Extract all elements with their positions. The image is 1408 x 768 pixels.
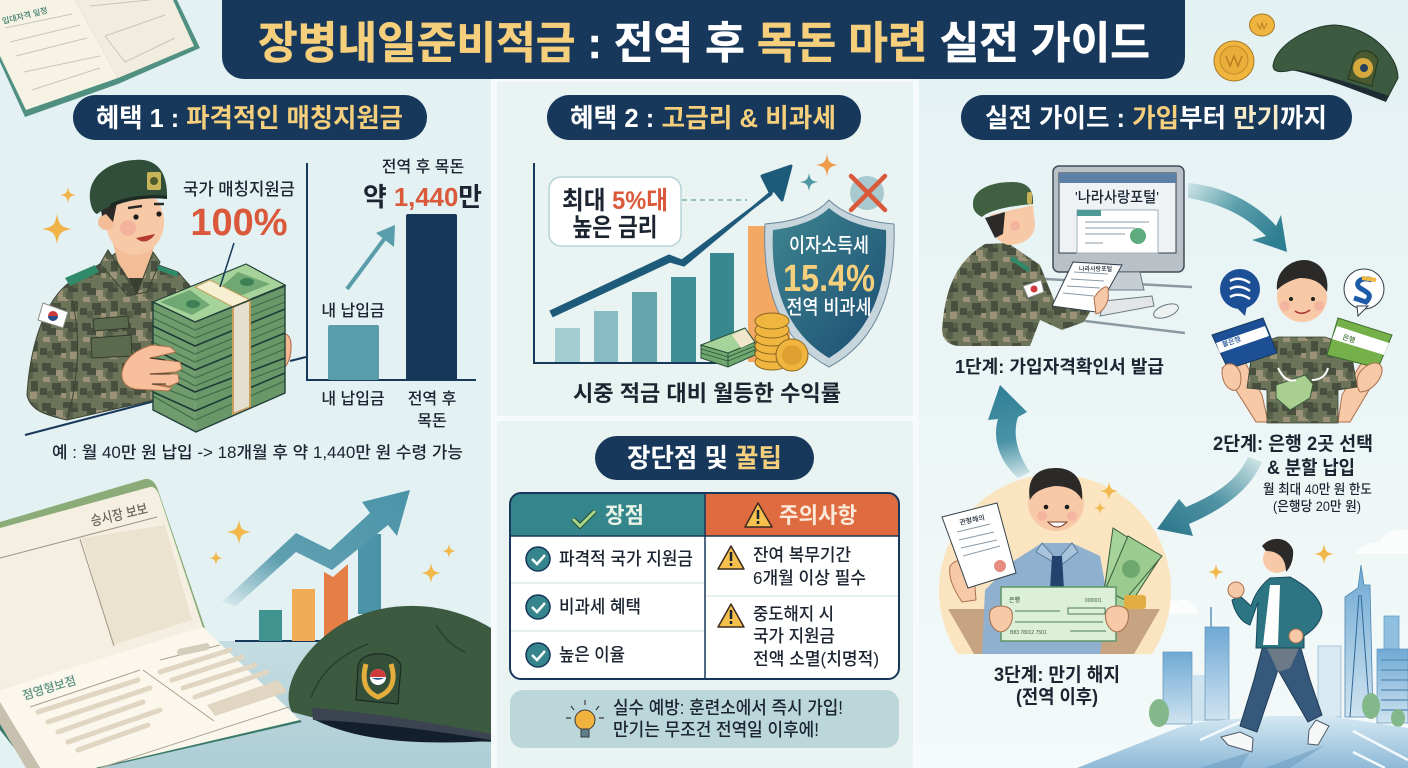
fist bbox=[1228, 582, 1244, 598]
panel: practical guide background bbox=[919, 0, 1408, 768]
arrow: rate growth bbox=[550, 166, 791, 316]
illustration: step 2 soldier with bank cards bbox=[1212, 260, 1392, 423]
chart: contribution versus final amount: 전역 후 목돈 bbox=[382, 158, 464, 176]
coins on counter bbox=[1124, 595, 1146, 609]
callout: maximum rate: 최대 5%대 bbox=[562, 187, 668, 215]
illustration: open bank book bbox=[0, 479, 302, 768]
collar bbox=[100, 250, 160, 296]
desk lines bbox=[1045, 279, 1192, 333]
bar: final amount bbox=[406, 214, 457, 380]
step 2 label: 2단계: 은행 2곳 선택 bbox=[1213, 433, 1373, 455]
pro row 3 bbox=[526, 643, 625, 667]
bank bubble: blue bbox=[1220, 269, 1260, 316]
icon: tax-free shield bbox=[765, 200, 894, 367]
caution row 2: 전액 소멸(치명적) bbox=[753, 649, 879, 669]
road bbox=[1077, 716, 1408, 768]
pro row 2: 비과세 혜택 bbox=[559, 597, 641, 617]
bank card: green: 은행 bbox=[1341, 332, 1356, 345]
caution row 2 bbox=[718, 604, 879, 669]
step 2 label: 월 최대 40만 원 한도 bbox=[1263, 481, 1372, 497]
callout: mistake prevention tip bbox=[510, 690, 899, 748]
sparkles: step 3 bbox=[1094, 482, 1118, 514]
keyboard and mouse bbox=[1100, 296, 1154, 316]
panel: benefit 1 background bbox=[0, 0, 491, 768]
paper band bbox=[195, 280, 250, 307]
step 3 label: 3단계: 만기 해지 bbox=[994, 664, 1120, 686]
paper in hand bbox=[1052, 262, 1122, 312]
head bbox=[1028, 475, 1084, 531]
dashed leader line bbox=[682, 199, 747, 201]
illustration: step 3 circle scene bbox=[939, 468, 1171, 654]
sparkles: growth bbox=[209, 520, 456, 583]
heading: pros and tips bbox=[595, 436, 814, 480]
callout: mistake prevention tip: 실수 예방: 훈련소에서 즉시 가입! bbox=[613, 698, 843, 718]
pro row 3: 높은 이율 bbox=[559, 645, 625, 665]
bank card: green bbox=[1327, 318, 1392, 368]
near hand on stack bbox=[122, 345, 182, 391]
jacket bbox=[1232, 577, 1322, 648]
table header: pros: 장점 bbox=[605, 503, 644, 528]
table header: cautions bbox=[705, 493, 899, 536]
arrow: step 3 to step 1 bbox=[988, 385, 1030, 478]
bank card: blue: 불은행 bbox=[1221, 334, 1242, 349]
sparkles: walking man bbox=[1208, 544, 1334, 580]
money stack bbox=[153, 264, 285, 432]
heading: benefit 2 bbox=[547, 95, 861, 140]
table header: cautions: 주의사항 bbox=[779, 503, 857, 528]
caution row 1: 6개월 이상 필수 bbox=[753, 568, 866, 588]
panel: benefit 2 background bbox=[497, 82, 913, 416]
head bbox=[1263, 545, 1291, 573]
sparkles: rate bbox=[800, 154, 838, 191]
arrow: growth bbox=[347, 238, 385, 289]
heading: practical guide: 실전 가이드 : 가입부터 만기까지 bbox=[985, 103, 1327, 133]
chart: interest rate growth bbox=[534, 163, 791, 363]
city skyline bbox=[1149, 530, 1408, 727]
illustration: discharged man walking bbox=[1221, 539, 1329, 752]
illustration: top-right coins bbox=[1214, 14, 1274, 81]
illustration: top-right beret bbox=[1273, 25, 1398, 102]
step 2 label bbox=[1213, 433, 1373, 514]
clouds bbox=[1355, 530, 1408, 554]
book label text: 입대자격 일정 bbox=[1, 5, 48, 26]
caution row 2: 국가 지원금 bbox=[753, 626, 835, 646]
book heading: 승시장 보보 bbox=[89, 500, 149, 529]
icon: tax-free shield: 15.4% bbox=[783, 258, 875, 300]
counter bbox=[948, 609, 1160, 654]
monitor bbox=[1053, 166, 1184, 290]
chart: contribution versus final amount: 내 납입금 bbox=[321, 390, 385, 408]
icon: tax-free shield: 이자소득세 bbox=[789, 234, 869, 257]
heading: pros and tips: 장단점 및 꿀팁 bbox=[627, 443, 782, 473]
pro row 1 bbox=[526, 547, 693, 571]
uniform bbox=[27, 250, 192, 420]
cash fan bbox=[1102, 528, 1160, 620]
beret bbox=[90, 160, 167, 214]
check: 000001 bbox=[1085, 598, 1102, 604]
chart: contribution versus final amount: 목돈 bbox=[417, 413, 447, 430]
sleeve fold bbox=[68, 300, 78, 418]
callout: maximum rate bbox=[549, 177, 681, 246]
caption: benefit 2: 시중 적금 대비 월등한 수익률 bbox=[573, 381, 841, 406]
arrow: zigzag growth bbox=[222, 490, 410, 606]
caution row 2: 중도해지 시 bbox=[753, 604, 834, 624]
head bbox=[106, 189, 164, 255]
step 3 label: (전역 이후) bbox=[1016, 686, 1098, 708]
check: B83 78012 7501 bbox=[1010, 630, 1047, 636]
hand in pocket bbox=[1289, 629, 1303, 643]
icon: tax-free shield: 전역 비과세 bbox=[786, 296, 872, 319]
sparkles: soldier bbox=[42, 187, 76, 244]
illustration: green beret bbox=[289, 606, 491, 743]
icon: cash and coins bbox=[701, 313, 808, 371]
step 1 label: 1단계: 가입자격확인서 발급 bbox=[955, 357, 1164, 377]
chart: contribution versus final amount bbox=[307, 158, 482, 430]
left hand and document bbox=[950, 560, 976, 602]
heading: benefit 1: 혜택 1 : 파격적인 매칭지원금 bbox=[96, 103, 403, 133]
chart: contribution versus final amount: 약 1,440만 bbox=[363, 182, 482, 212]
epaulettes bbox=[65, 265, 178, 286]
illustration: step 3 circle scene: 관형해의 bbox=[959, 513, 986, 527]
step 2 label: (은행당 20만 원) bbox=[1273, 499, 1361, 514]
example text: 예 : 월 40만 원 납입 -> 18개월 후 약 1,440만 원 수령 가능 bbox=[52, 443, 463, 462]
lower arms bbox=[1222, 362, 1382, 422]
table header: pros bbox=[510, 493, 705, 536]
panel: pros and cons background bbox=[497, 421, 913, 768]
trees bbox=[1149, 699, 1169, 727]
callout: matching 100%: 국가 매칭지원금 bbox=[183, 180, 295, 199]
pro row 2 bbox=[526, 595, 641, 619]
hands on check bbox=[989, 606, 1128, 632]
shirt bbox=[1247, 337, 1357, 423]
soldier head bbox=[990, 205, 1035, 245]
heading: benefit 1 bbox=[73, 95, 427, 140]
callout: matching 100%: 100% bbox=[190, 202, 288, 244]
trousers bbox=[1240, 645, 1322, 732]
chart: contribution versus final amount: 전역 후 bbox=[408, 390, 456, 408]
illustration: step 1 soldier at computer bbox=[942, 166, 1192, 346]
shoes bbox=[1221, 732, 1253, 752]
bar: my contribution bbox=[328, 325, 379, 380]
caution row 1 bbox=[718, 545, 866, 588]
illustration: rising bars and arrow bbox=[222, 490, 410, 641]
title banner bbox=[222, 0, 1185, 79]
heading: practical guide bbox=[961, 95, 1352, 140]
t-shirt bbox=[1263, 585, 1280, 645]
bank card: blue bbox=[1212, 318, 1277, 369]
arrow: step 1 to step 2 bbox=[1188, 183, 1287, 252]
title text: 장병내일준비적금 : 전역 후 목돈 마련 실전 가이드 bbox=[258, 19, 1150, 68]
arrow: step 2 to step 3 bbox=[1157, 457, 1262, 536]
icon: light bulb bbox=[566, 700, 604, 737]
heading: benefit 2: 혜택 2 : 고금리 & 비과세 bbox=[570, 103, 836, 133]
book subheading: 점영형보점 bbox=[20, 672, 78, 703]
callout: maximum rate: 높은 금리 bbox=[572, 214, 658, 242]
table line bbox=[25, 357, 306, 435]
pockets bbox=[91, 316, 132, 358]
illustration: open record book top-left bbox=[0, 0, 200, 117]
step 2 label: & 분할 납입 bbox=[1267, 457, 1355, 479]
caution row 1: 잔여 복무기간 bbox=[753, 545, 851, 565]
pro row 1: 파격적 국가 지원금 bbox=[559, 549, 693, 569]
pointer line bbox=[220, 243, 234, 287]
illustration: soldier holding money bbox=[25, 160, 306, 435]
callout: mistake prevention tip: 만기는 무조건 전역일 이후에! bbox=[613, 720, 819, 740]
hands bbox=[1222, 363, 1382, 392]
table: pros and cautions bbox=[510, 493, 899, 679]
icon: no tax cross bbox=[850, 176, 885, 210]
shirt bbox=[982, 543, 1108, 654]
callout: matching 100% bbox=[183, 180, 295, 244]
bank bubble: white bbox=[1344, 269, 1384, 316]
far hand behind stack bbox=[277, 334, 291, 370]
soldier beret bbox=[973, 182, 1033, 217]
portal name: '나라사랑포털' bbox=[1075, 189, 1159, 206]
beret badge bbox=[356, 654, 401, 704]
check bbox=[1001, 587, 1116, 641]
soldier body bbox=[942, 243, 1090, 346]
illustration: step 1 soldier at computer: 나라사랑포털 bbox=[1079, 265, 1112, 273]
check: 은행 bbox=[1009, 596, 1020, 604]
flag patch bbox=[38, 303, 68, 328]
neck and undershirt bbox=[112, 238, 156, 292]
split payment cash bbox=[1276, 375, 1313, 410]
step 3 label bbox=[994, 664, 1120, 708]
head bbox=[1277, 272, 1327, 322]
chart: contribution versus final amount: 내 납입금 bbox=[321, 302, 385, 320]
ground tone bbox=[60, 641, 491, 768]
